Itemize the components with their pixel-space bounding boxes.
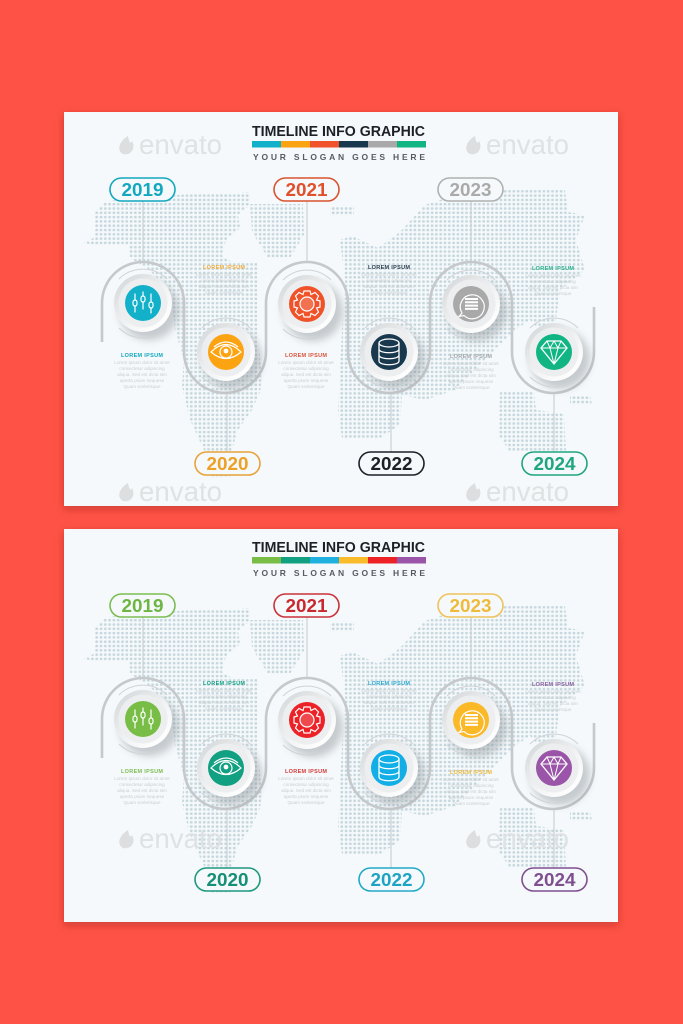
pill 2022: 2022 [370, 454, 412, 474]
text block 2019: LOREM IPSUM [121, 769, 163, 775]
connector lines [143, 201, 554, 452]
text block 2023: aliqua. Sed est dicta sim [446, 373, 496, 378]
pill 2021: 2021 [286, 180, 328, 200]
text block 2019: LOREM IPSUM [121, 353, 163, 359]
milestone 2024 [525, 734, 590, 805]
pill 2024 [522, 868, 587, 891]
pill 2020 [195, 452, 260, 475]
text block 2019: aliqua. Sed est dicta sim [117, 788, 167, 793]
text block 2024: consectetur adipiscing [530, 695, 576, 700]
text block 2019: Lorem ipsum dolor sit amet [114, 776, 170, 781]
text block 2022 [361, 681, 417, 711]
milestone 2021 [278, 686, 343, 757]
pill 2021 [274, 178, 339, 201]
text block 2022: LOREM IPSUM [368, 265, 410, 271]
text block 2020: Quam scelerisque [205, 290, 243, 295]
text block 2023: consectetur adipiscing [448, 367, 494, 372]
text block 2020: aliqua. Sed est dicta sim [199, 700, 249, 705]
text block 2021: aperta psum nequese [284, 794, 329, 799]
text block 2021: Lorem ipsum dolor sit amet [278, 360, 334, 365]
text block 2021 [278, 769, 334, 805]
text block 2019 [114, 353, 170, 389]
text block 2023: Lorem ipsum dolor sit amet [443, 777, 499, 782]
slogan: YOUR SLOGAN GOES HERE [253, 152, 425, 162]
pill 2019: 2019 [122, 180, 164, 200]
milestone 2020 [197, 318, 262, 389]
text block 2022: consectetur adipiscing [366, 694, 412, 699]
text block 2020: Lorem ipsum dolor sit amet [196, 272, 252, 277]
text block 2019: Quam scelerisque [123, 800, 161, 805]
text block 2023: LOREM IPSUM [450, 354, 492, 360]
colour bar [252, 141, 426, 148]
text block 2019: aperta psum nequese [120, 378, 165, 383]
text block 2020: LOREM IPSUM [203, 265, 245, 271]
text block 2019: Lorem ipsum dolor sit amet [114, 360, 170, 365]
text block 2021: aliqua. Sed est dicta sim [281, 788, 331, 793]
text block 2022 [361, 265, 417, 295]
title: TIMELINE INFO GRAPHIC [252, 540, 426, 556]
text block 2024: Quam scelerisque [534, 707, 572, 712]
milestone 2022 [360, 318, 425, 389]
milestone 2024 [525, 318, 590, 389]
milestone 2021 [278, 270, 343, 341]
milestone 2019 [114, 269, 179, 340]
text block 2019 [114, 769, 170, 805]
serpentine path [102, 678, 594, 809]
text block 2023: Lorem ipsum dolor sit amet [443, 361, 499, 366]
text block 2023: LOREM IPSUM [450, 770, 492, 776]
text block 2021: Quam scelerisque [287, 384, 325, 389]
world map [84, 606, 592, 894]
text block 2022: aliqua. Sed est dicta sim [364, 700, 414, 705]
milestone 2022 [360, 734, 425, 805]
text block 2019: consectetur adipiscing [119, 782, 165, 787]
pill 2019 [110, 594, 175, 617]
pill 2022: 2022 [370, 870, 412, 890]
text block 2021: consectetur adipiscing [283, 366, 329, 371]
pill 2020: 2020 [206, 454, 248, 474]
text block 2020: consectetur adipiscing [201, 278, 247, 283]
pill 2024 [522, 452, 587, 475]
text block 2021: consectetur adipiscing [283, 782, 329, 787]
pill 2024: 2024 [534, 454, 576, 474]
text block 2020: consectetur adipiscing [201, 694, 247, 699]
text block 2021: LOREM IPSUM [285, 769, 327, 775]
text block 2023: consectetur adipiscing [448, 783, 494, 788]
pill 2021: 2021 [286, 596, 328, 616]
text block 2022: LOREM IPSUM [368, 681, 410, 687]
text block 2022: Quam scelerisque [370, 290, 408, 295]
text block 2023: aperta psum nequese [449, 795, 494, 800]
text block 2023: aliqua. Sed est dicta sim [446, 789, 496, 794]
text block 2023 [443, 354, 499, 390]
pill 2023: 2023 [450, 180, 492, 200]
text block 2021: Lorem ipsum dolor sit amet [278, 776, 334, 781]
pill 2021 [274, 594, 339, 617]
pill 2019: 2019 [122, 596, 164, 616]
text block 2024: Lorem ipsum dolor sit amet [525, 273, 581, 278]
serpentine path [102, 262, 594, 393]
text block 2020: aliqua. Sed est dicta sim [199, 284, 249, 289]
milestone 2023 [442, 270, 507, 341]
pill 2022 [359, 452, 424, 475]
text block 2023 [443, 770, 499, 806]
colour bar [252, 557, 426, 564]
milestone 2023 [442, 686, 507, 757]
pill 2022 [359, 868, 424, 891]
text block 2024 [525, 266, 581, 296]
text block 2022: aliqua. Sed est dicta sim [364, 284, 414, 289]
text block 2023: Quam scelerisque [452, 385, 490, 390]
world map [84, 190, 592, 478]
text block 2019: consectetur adipiscing [119, 366, 165, 371]
panel: top timeline [64, 112, 618, 507]
watermarks [119, 129, 569, 507]
text block 2019: aliqua. Sed est dicta sim [117, 372, 167, 377]
pill 2020: 2020 [206, 870, 248, 890]
text block 2021 [278, 353, 334, 389]
text block 2023: Quam scelerisque [452, 801, 490, 806]
text block 2024: LOREM IPSUM [532, 682, 574, 688]
text block 2022: Quam scelerisque [370, 706, 408, 711]
text block 2021: aperta psum nequese [284, 378, 329, 383]
text block 2021: Quam scelerisque [287, 800, 325, 805]
text block 2019: Quam scelerisque [123, 384, 161, 389]
milestone 2020 [197, 734, 262, 805]
pill 2023 [438, 594, 503, 617]
title: TIMELINE INFO GRAPHIC [252, 124, 426, 140]
text block 2024: aliqua. Sed est dicta sim [528, 701, 578, 706]
text block 2024: aliqua. Sed est dicta sim [528, 285, 578, 290]
pill 2019 [110, 178, 175, 201]
text block 2024: Quam scelerisque [534, 291, 572, 296]
text block 2021: LOREM IPSUM [285, 353, 327, 359]
text block 2022: Lorem ipsum dolor sit amet [361, 272, 417, 277]
text block 2019: aperta psum nequese [120, 794, 165, 799]
text block 2020: Quam scelerisque [205, 706, 243, 711]
pill 2020 [195, 868, 260, 891]
text block 2024: consectetur adipiscing [530, 279, 576, 284]
milestone 2019 [114, 685, 179, 756]
pill 2024: 2024 [534, 870, 576, 890]
text block 2024: LOREM IPSUM [532, 266, 574, 272]
text block 2024: Lorem ipsum dolor sit amet [525, 689, 581, 694]
pill 2023: 2023 [450, 596, 492, 616]
text block 2021: aliqua. Sed est dicta sim [281, 372, 331, 377]
text block 2023: aperta psum nequese [449, 379, 494, 384]
slogan: YOUR SLOGAN GOES HERE [253, 568, 425, 578]
text block 2020 [196, 681, 252, 711]
text block 2022: consectetur adipiscing [366, 278, 412, 283]
watermarks [119, 823, 569, 854]
connector lines [143, 617, 554, 868]
pill 2023 [438, 178, 503, 201]
text block 2022: Lorem ipsum dolor sit amet [361, 688, 417, 693]
panel: bottom timeline [64, 529, 618, 922]
text block 2020: LOREM IPSUM [203, 681, 245, 687]
text block 2024 [525, 682, 581, 712]
text block 2020: Lorem ipsum dolor sit amet [196, 688, 252, 693]
text block 2020 [196, 265, 252, 295]
